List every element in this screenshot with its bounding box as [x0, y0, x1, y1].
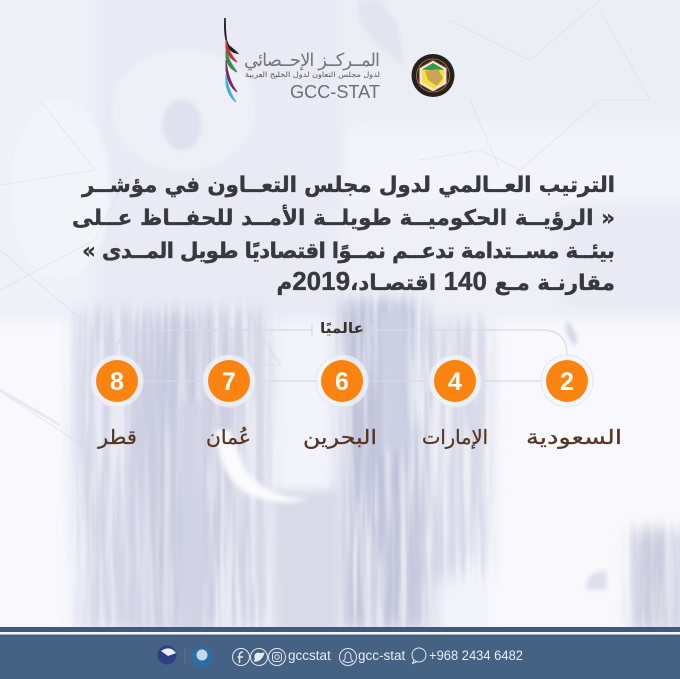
title [72, 173, 615, 296]
logo: GCC emblem [412, 54, 454, 97]
logo: GCC-STAT ribbon [225, 18, 237, 102]
elephant tusk [215, 430, 309, 502]
social icons [232, 648, 426, 666]
heading: globally: عالميًا [320, 321, 364, 337]
faint circle motif [10, 0, 607, 590]
logo: GCC-STAT wordmark: GCC-STAT [290, 82, 380, 102]
country labels: البحرين [303, 425, 377, 449]
connector lines [116, 324, 567, 381]
country labels: عُمان [206, 425, 251, 449]
title: « الرؤيــة الحكوميــة طويلــة الأمــد للحفــاظ عــلى [72, 203, 615, 231]
footer contact text: +968 2434 6482 [429, 648, 523, 663]
footer contact text: gccstat [288, 648, 331, 663]
logo: GCC-STAT wordmark: المــركــز الإحــصائي [244, 50, 380, 71]
country labels: الإمارات [422, 425, 488, 449]
logo: GCC-STAT wordmark: لدول مجلس التعاون لدول الخليج العربية [245, 70, 380, 79]
footer contact text: gcc-stat [358, 648, 406, 663]
footer certification badges [158, 646, 212, 668]
rank circles [91, 355, 593, 407]
country labels: قطر [97, 425, 137, 449]
rank circles: 2 [560, 368, 574, 396]
footer contact text [288, 648, 523, 663]
rank circles: 7 [222, 368, 236, 396]
rank circles: 8 [110, 368, 124, 396]
country labels: السعودية [526, 425, 622, 449]
logo: GCC-STAT wordmark [244, 50, 380, 102]
title: مقارنـة مـع 140 اقتصـاد،2019م [276, 266, 615, 296]
rank circles: 6 [335, 368, 349, 396]
title: بيئــة مســتدامة تدعــم نمــوًا اقتصاديًا طويل المــدى » [82, 239, 615, 264]
footer band [0, 627, 680, 679]
title: الترتيب العــالمي لدول مجلس التعــاون في مؤشــر [81, 173, 615, 198]
country labels [97, 425, 622, 449]
rank circles: 4 [448, 368, 462, 396]
